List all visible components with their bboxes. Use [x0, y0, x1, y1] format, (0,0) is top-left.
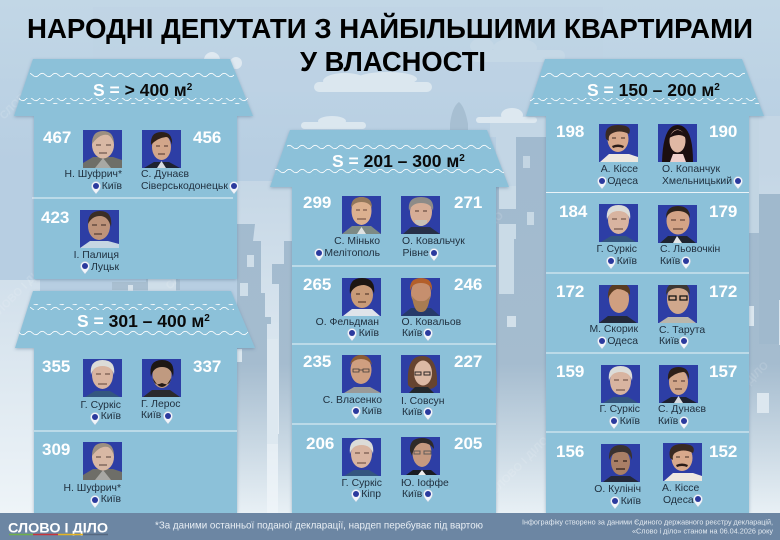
- entry: Суркіс 184: Київ: [617, 256, 637, 267]
- heading: 301-400: 2: [204, 313, 210, 324]
- entry: Кіссе 198: А. Кіссе: [601, 164, 638, 175]
- watermarks: СЛОВО І ДІЛО: [294, 324, 357, 387]
- entry: Копанчук 190: О. Копанчук: [662, 164, 720, 175]
- entry: Суркіс 184: 184: [559, 202, 588, 221]
- entry: Лерос 337: [141, 357, 221, 424]
- entry: Кулініч 156: [556, 442, 641, 509]
- entry: Іоффе 205: 205: [454, 434, 482, 453]
- entry: Совсун 227: І. Совсун: [401, 396, 445, 407]
- entry: Суркіс 355: Г. Суркіс: [80, 400, 121, 411]
- entry: Копанчук 190: 190: [709, 122, 737, 141]
- entry: Шуфрич 309: [42, 440, 122, 508]
- entry: Скорик 172: М. Скорик: [589, 324, 638, 335]
- entry: Ковальчук 271: Рівне: [402, 248, 429, 259]
- entry: Ковальов 246: 246: [454, 275, 482, 294]
- roof: [526, 59, 764, 513]
- entry: Ковальов 246: [401, 275, 482, 341]
- entry: Шуфрич 309: 309: [42, 440, 70, 459]
- heading: 150-200: 2: [714, 82, 720, 93]
- entry: Совсун 227: 227: [454, 352, 482, 371]
- entry: Лерос 337: Г. Лерос: [141, 399, 180, 410]
- entry: Шуфрич 309: Н. Шуфрич*: [64, 482, 121, 494]
- entry: Палиця 423: І. Палиця: [74, 250, 119, 261]
- watermarks: СЛОВО І ДІЛО: [489, 434, 552, 497]
- entry: Шуфрич 467: Київ: [102, 181, 122, 192]
- entry: Копанчук 190: Хмельницький: [662, 176, 732, 187]
- panel: house over 400 m2: [14, 59, 253, 279]
- entry: Палиця 423: [41, 208, 119, 274]
- entry: Кіссе 152: Одеса: [663, 495, 694, 506]
- entry: Суркіс 206: 206: [306, 434, 334, 453]
- heading: over 400: S = > 400 м: [93, 80, 187, 100]
- entry: Кіссе 152: [662, 442, 737, 507]
- entry: Ковальчук 271: [401, 193, 482, 261]
- entry: Іоффе 205: Ю. Іоффе: [401, 477, 449, 489]
- roof: [14, 59, 253, 279]
- source note: Інфографіку створено за даними Єдиного державного реєстру декларацій,: [522, 518, 773, 526]
- entry: Мінько 299: [303, 193, 381, 261]
- panel: house 201-300 m2: [270, 130, 509, 513]
- entry: Кулініч 156: 156: [556, 442, 584, 461]
- roof wave lines: [19, 304, 248, 336]
- entry: Тарута 172: 172: [709, 282, 737, 301]
- entry: Шуфрич 309: Київ: [101, 494, 121, 505]
- entry: Льовочкін 179: [658, 202, 737, 269]
- footer bar: [0, 513, 780, 540]
- entry: Суркіс 355: 355: [42, 357, 70, 376]
- entry: Льовочкін 179: 179: [709, 202, 737, 221]
- title: У ВЛАСНОСТІ: [300, 46, 486, 77]
- entry: Мінько 299: 299: [303, 193, 331, 212]
- heading: 201-300: 2: [459, 153, 465, 164]
- entry: Кулініч 156: О. Кулініч: [594, 484, 641, 495]
- entry: Совсун 227: [401, 352, 482, 420]
- entry: Кіссе 198: 198: [556, 122, 584, 141]
- entry: Іоффе 205: [401, 434, 482, 502]
- entry: Суркіс 159: Київ: [620, 416, 640, 427]
- watermarks: СЛОВО І ДІЛО: [164, 229, 227, 292]
- entry: Суркіс 206: [306, 434, 382, 502]
- entry: Палиця 423: 423: [41, 208, 69, 227]
- entry: Фельдман 265: 265: [303, 275, 331, 294]
- watermarks: СЛОВО І ДІЛО: [709, 359, 772, 422]
- entry: Шуфрич 467: 467: [43, 128, 71, 147]
- footnote: *За даними останньої поданої декларації, нардеп перебуває під вартою: [155, 520, 483, 532]
- entry: Суркіс 159: 159: [556, 362, 584, 381]
- entry: Скорик 172: Одеса: [607, 336, 638, 347]
- watermarks: СЛОВО І ДІЛО: [589, 179, 652, 242]
- watermarks: СЛОВО І ДІЛО: [444, 209, 507, 272]
- entry: Скорик 172: 172: [556, 282, 584, 301]
- title: НАРОДНІ ДЕПУТАТИ З НАЙБІЛЬШИМИ КВАРТИРАМИ: [27, 13, 753, 44]
- entry: Тарута 172: [658, 282, 737, 349]
- entry: Тарута 172: Київ: [659, 336, 680, 347]
- entry: Власенко 235: Київ: [362, 406, 382, 417]
- entry: Шуфрич 467: [43, 128, 122, 194]
- entry: Фельдман 265: О. Фельдман: [316, 317, 379, 328]
- entry: Суркіс 184: [559, 202, 638, 269]
- entry: Ковальчук 271: О. Ковальчук: [402, 236, 465, 247]
- entry: Дунаєв 456: [141, 128, 238, 194]
- entry: Ковальов 246: О. Ковальов: [402, 317, 462, 328]
- roof: [270, 130, 509, 513]
- entry: Дунаєв 157: 157: [709, 362, 737, 381]
- roof wave lines: [19, 72, 248, 104]
- entry: Власенко 235: С. Власенко: [323, 395, 382, 406]
- entry: Дунаєв 157: [658, 362, 737, 429]
- source note: [522, 518, 773, 536]
- roof wave lines: [275, 143, 504, 175]
- roof: [15, 291, 255, 513]
- panel: house 301-400 m2: [15, 291, 255, 513]
- entry: Дунаєв 157: С. Дунаєв: [658, 404, 707, 415]
- entry: Мінько 299: Мелітополь: [324, 248, 380, 259]
- entry: Кулініч 156: Київ: [621, 496, 641, 507]
- entry: Іоффе 205: Київ: [402, 489, 423, 500]
- entry: Кіссе 198: Одеса: [607, 176, 638, 187]
- entry: Ковальов 246: Київ: [402, 328, 423, 339]
- entry: Совсун 227: Київ: [402, 407, 423, 418]
- entry: Льовочкін 179: С. Льовочкін: [660, 244, 721, 255]
- title: [27, 13, 753, 77]
- entry: Льовочкін 179: Київ: [660, 256, 681, 267]
- entry: Дунаєв 456: Сіверськодонецьк: [141, 181, 228, 192]
- entry: Тарута 172: С. Тарута: [659, 325, 705, 336]
- entry: Суркіс 159: [556, 362, 640, 429]
- entry: Фельдман 265: [303, 275, 381, 341]
- panel: house 150-200 m2: [526, 59, 764, 513]
- entry: Власенко 235: [303, 352, 382, 419]
- entry: Фельдман 265: Київ: [359, 328, 379, 339]
- entry: Мінько 299: С. Мінько: [334, 236, 380, 247]
- source note: «Слово і діло» станом на 06.04.2026 року: [632, 526, 773, 536]
- logo: СЛОВО І ДІЛО: [8, 520, 108, 536]
- entry: Палиця 423: Луцьк: [91, 262, 119, 273]
- watermarks: СЛОВО І ДІЛО: [129, 394, 192, 457]
- entry: Власенко 235: 235: [303, 352, 331, 371]
- heading: 201-300: S = 201 – 300 м: [332, 151, 459, 171]
- heading: over 400: 2: [187, 82, 193, 93]
- entry: Шуфрич 467: Н. Шуфрич*: [65, 168, 122, 180]
- entry: Суркіс 206: Кіпр: [361, 489, 381, 500]
- entry: Кіссе 152: А. Кіссе: [662, 483, 699, 494]
- entry: Дунаєв 456: 456: [193, 128, 221, 147]
- entry: Лерос 337: Київ: [141, 410, 162, 421]
- entry: Лерос 337: 337: [193, 357, 221, 376]
- heading: 301-400: S = 301 – 400 м: [77, 311, 204, 331]
- heading: 150-200: S = 150 – 200 м: [587, 80, 714, 100]
- entry: Суркіс 355: Київ: [101, 411, 121, 422]
- entry: Кіссе 198: [556, 122, 638, 189]
- entry: Копанчук 190: [658, 122, 742, 189]
- entry: Дунаєв 157: Київ: [658, 416, 679, 427]
- entry: Ковальчук 271: 271: [454, 193, 482, 212]
- entry: Суркіс 206: Г. Суркіс: [341, 478, 382, 489]
- entry: Суркіс 184: Г. Суркіс: [596, 244, 637, 255]
- roof wave lines: [530, 72, 759, 104]
- entry: Суркіс 159: Г. Суркіс: [599, 404, 640, 415]
- entry: Кіссе 152: 152: [709, 442, 737, 461]
- entry: Скорик 172: [556, 282, 638, 349]
- entry: Суркіс 355: [42, 357, 122, 425]
- entry: Дунаєв 456: С. Дунаєв: [141, 169, 190, 180]
